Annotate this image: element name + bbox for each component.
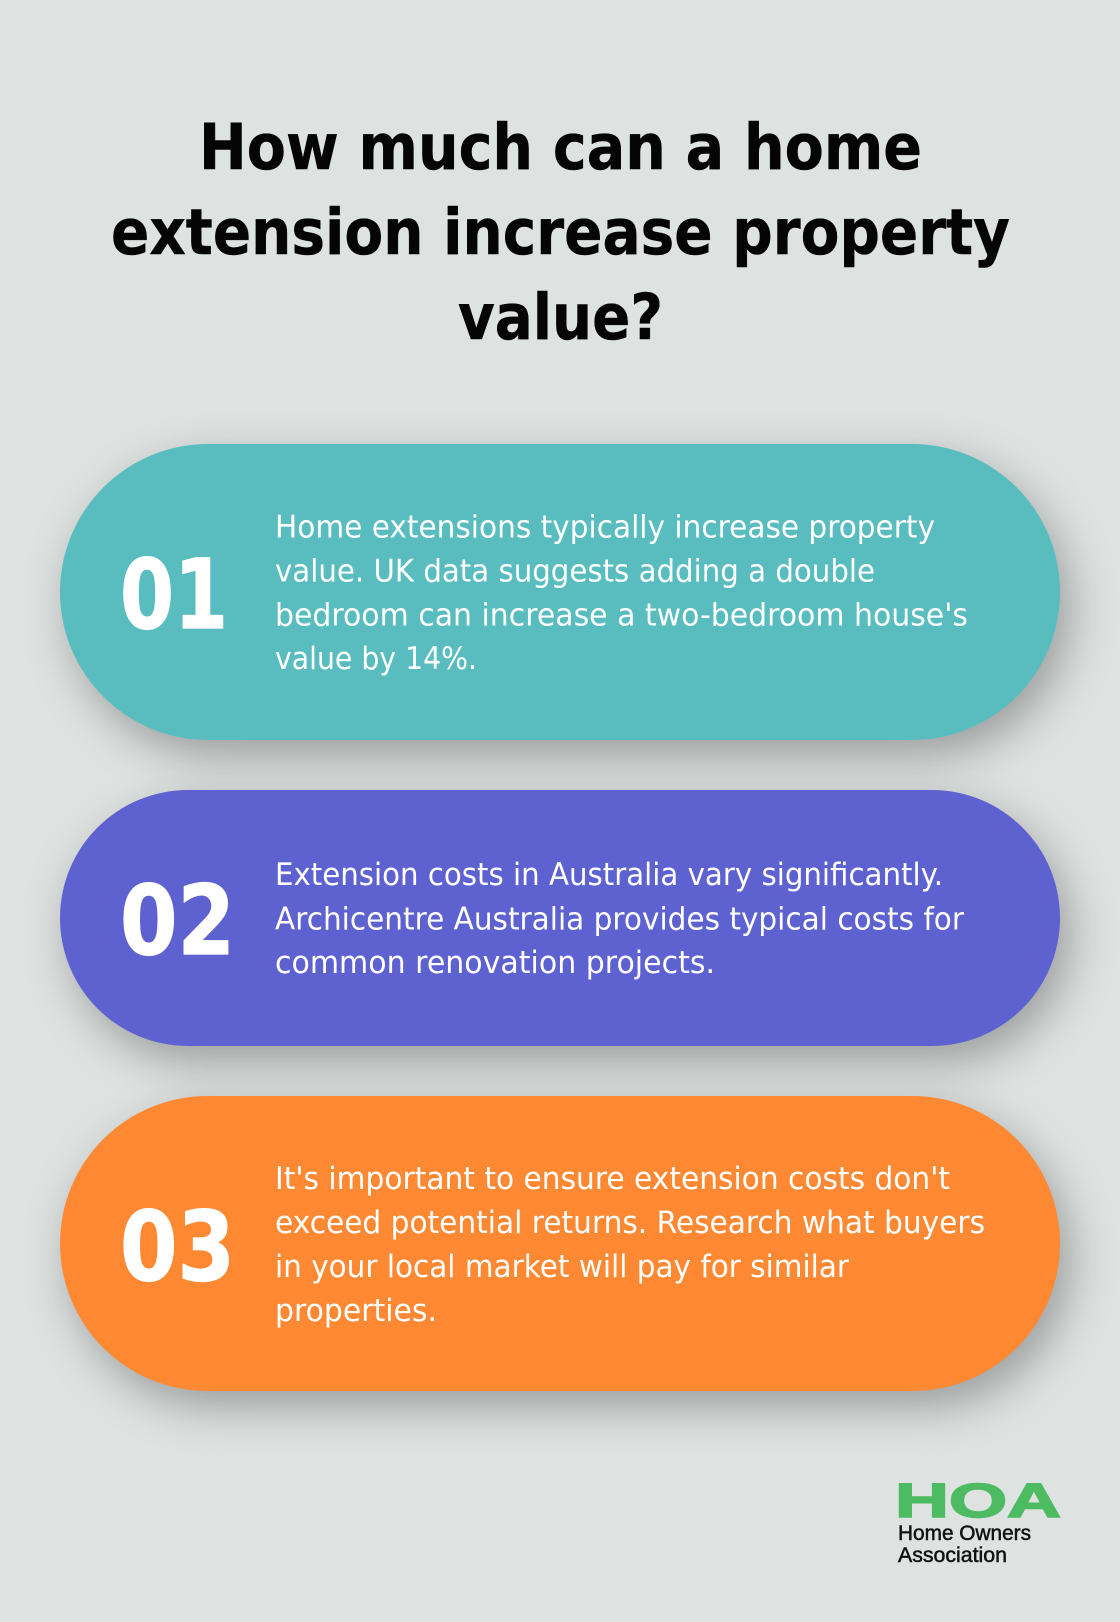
title (111, 111, 1010, 354)
orange pill background (60, 1096, 1060, 1391)
logo tagline (898, 1522, 1031, 1567)
logo: Home Owners Association (895, 1475, 1061, 1567)
panel: step 03 (60, 1096, 1060, 1391)
title: extension increase property (111, 196, 1010, 269)
teal pill background (60, 444, 1060, 740)
text: step 03 description: It's important to ensure extension costs don't (275, 1161, 950, 1197)
text: step 03 description: in your local market will pay for similar (275, 1249, 849, 1285)
number 03: 03 (120, 1191, 235, 1303)
number 02: 02 (120, 865, 235, 977)
panel: step 01 (60, 444, 1060, 740)
text: step 01 description: bedroom can increase a two-bedroom house's (275, 598, 968, 634)
title: How much can a home (199, 111, 922, 184)
logo tagline: Home Owners (898, 1522, 1031, 1545)
text: step 01 description (275, 510, 968, 677)
text: step 02 description: Extension costs in Australia vary significantly. (275, 857, 943, 893)
text: step 01 description: value by 14%. (275, 641, 477, 677)
text: step 01 description: Home extensions typically increase property (275, 510, 935, 546)
text: step 03 description (275, 1161, 985, 1329)
panel: step 02 (60, 790, 1060, 1046)
logo tagline: Association (898, 1544, 1007, 1567)
text: step 02 description: Archicentre Australia provides typical costs for (275, 902, 964, 938)
title: value? (458, 281, 663, 354)
text: step 03 description: exceed potential returns. Research what buyers (275, 1205, 985, 1241)
purple pill background (60, 790, 1060, 1046)
text: step 01 description: value. UK data suggests adding a double (275, 554, 875, 590)
text: step 02 description: common renovation projects. (275, 945, 715, 981)
number 01: 01 (120, 539, 228, 651)
logo wordmark HOA: HOA (895, 1475, 1061, 1528)
text: step 02 description (275, 857, 964, 981)
text: step 03 description: properties. (275, 1293, 437, 1329)
